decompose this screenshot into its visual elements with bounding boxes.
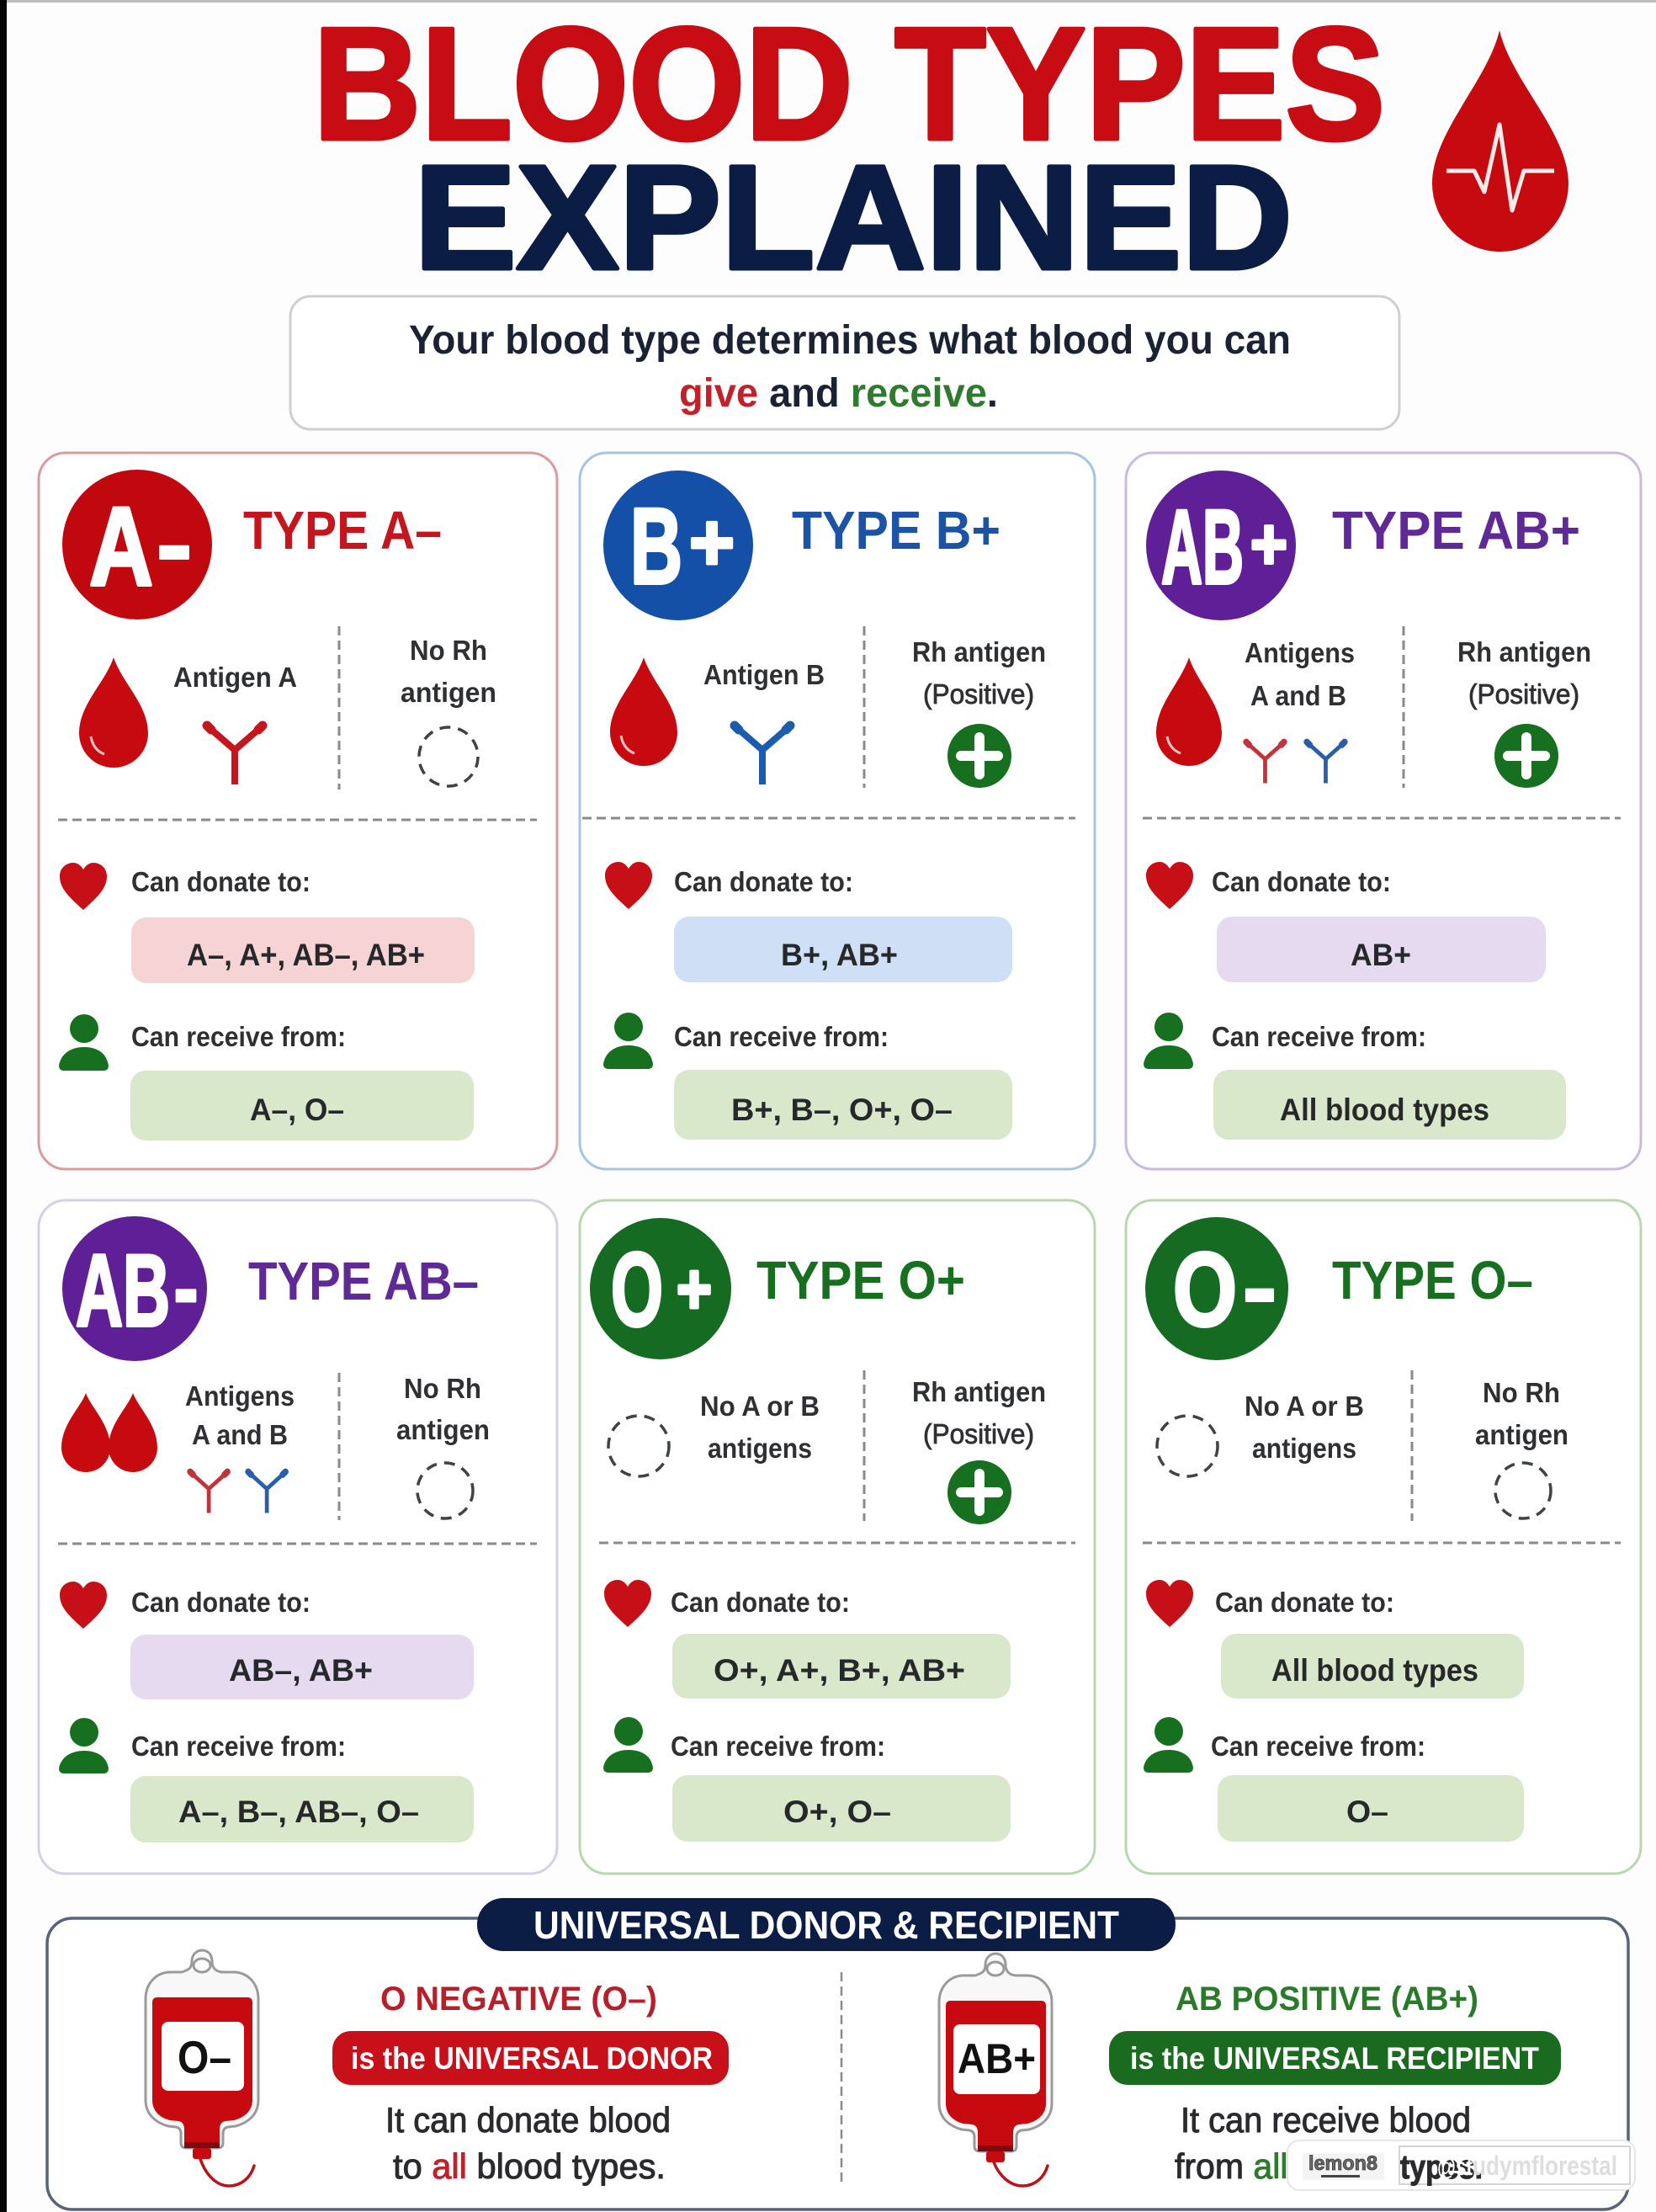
title: EXPLAINED [414,136,1292,300]
panel: type B+ [580,453,1095,1169]
badge: A-: – [158,482,190,607]
panel: universal donor and recipient [47,1898,1628,2209]
text: donor note [385,2100,671,2186]
text: antigens A and B: A and B [1250,680,1346,711]
badge: A-: A [89,485,153,609]
icon: antibody red [190,1471,227,1513]
text: antigens A and B: A and B [192,1419,288,1450]
subtitle box [290,296,1399,429]
icon: antibody red [1246,742,1284,783]
icon: heart [60,1582,107,1629]
icon: blood drop with pulse [1432,30,1568,252]
receive list [672,1775,1011,1842]
badge: AB- [62,1216,207,1361]
text: antigens A and B: Antigens [1245,637,1355,668]
icon: heart [1146,862,1193,909]
text: donor note: to all blood types. [393,2146,666,2186]
title: BLOOD TYPES [313,0,1385,173]
heading: type AB-: TYPE AB– [248,1251,479,1311]
subtitle box: Your blood type determines what blood you can [409,318,1291,363]
icon: blood bag AB+: AB+ [958,2035,1036,2082]
text: Rh antigen positive: Rh antigen [1457,636,1591,667]
donate list [674,917,1012,982]
text: Rh antigen positive: (Positive) [923,678,1034,710]
panel: type A- [39,453,557,1169]
panel: type O+ [580,1200,1095,1874]
badge: O+: + [677,1249,712,1328]
badge: AB+: AB [1161,489,1244,606]
text: antigens A and B [185,1380,295,1450]
donate list: A–, A+, AB–, AB+ [187,938,425,972]
pill: universal donor: is the UNIVERSAL DONOR [351,2041,713,2076]
icon: person [1144,1717,1193,1773]
icon: two drops [61,1393,157,1472]
subtitle box: give and receive. [679,371,998,416]
label: can receive: Can receive from: [1212,1021,1426,1052]
badge: O-: O [1173,1232,1237,1348]
label: can donate: Can donate to: [1212,866,1391,897]
icon: antibody red [207,726,263,784]
icon: empty circle [419,727,478,786]
receive list: O+, O– [783,1795,891,1829]
icon: antibody blue [248,1471,285,1513]
text: antigens A and B [1245,637,1355,711]
text: no Rh antigen: antigen [396,1414,490,1445]
text: Rh antigen positive: Rh antigen [912,1376,1046,1407]
text: recipient note: from all blood types. [1175,2146,1484,2186]
pill: universal recipient: is the UNIVERSAL RECIPIENT [1130,2041,1539,2076]
watermark: udymflorestal [1473,2151,1617,2181]
heading: type A-: TYPE A– [243,500,442,561]
icon: plus [1494,724,1558,788]
text: antigens A and B: Antigens [185,1380,295,1412]
heading: AB positive: AB POSITIVE (AB+) [1176,1981,1478,2018]
badge: AB-: AB [76,1233,170,1348]
icon: drop [610,657,677,766]
icon: drop [79,657,148,768]
text: Rh antigen positive [912,636,1046,710]
text: recipient note: It can receive blood [1181,2100,1471,2140]
donate list: AB–, AB+ [229,1653,373,1688]
text: no A or B antigens: No A or B [1245,1390,1364,1422]
icon: person [1144,1013,1193,1069]
watermark [1287,2140,1635,2190]
watermark: types. [1400,2149,1483,2186]
text: no A or B antigens: antigens [1252,1433,1356,1464]
receive list [674,1070,1012,1140]
panel: type AB+ [1126,453,1641,1169]
text: antigen A: Antigen A [173,662,297,693]
text: no Rh antigen [1475,1377,1568,1450]
icon: antibody blue [735,726,790,784]
badge: AB+: + [1250,504,1287,585]
text: no A or B antigens [700,1390,820,1464]
icon: heart [1146,1580,1193,1627]
heading: type B+: TYPE B+ [792,500,1000,561]
pill: universal recipient [1109,2031,1561,2085]
badge: A- [62,470,212,619]
text: Rh antigen positive [1457,636,1591,710]
label: can donate: Can donate to: [671,1587,850,1618]
badge: B+: B [630,487,682,607]
header pill: UNIVERSAL DONOR & RECIPIENT [533,1903,1119,1947]
icon: plus [947,1460,1011,1524]
watermark: lemon8 [1308,2152,1377,2175]
text: no Rh antigen: No Rh [410,635,487,666]
label: can donate: Can donate to: [674,866,853,897]
badge: O- [1145,1217,1288,1360]
text: no Rh antigen: No Rh [404,1373,481,1404]
receive list [1213,1070,1566,1140]
text: Rh antigen positive: (Positive) [1468,678,1579,710]
icon: heart [605,862,652,909]
donate list: All blood types [1271,1653,1478,1688]
receive list [130,1071,474,1141]
pill: universal donor [332,2031,729,2085]
text: Rh antigen positive: Rh antigen [912,636,1046,667]
icon: heart [60,863,107,910]
heading: O negative: O NEGATIVE (O–) [380,1981,657,2018]
title [313,0,1385,300]
icon: empty circle [608,1416,669,1476]
receive list: B+, B–, O+, O– [731,1093,953,1127]
receive list: A–, B–, AB–, O– [178,1795,419,1829]
label: can receive: Can receive from: [674,1021,889,1052]
label: can donate: Can donate to: [131,866,310,897]
icon: plus [947,724,1011,788]
icon: person [59,1718,109,1773]
donate list [131,917,475,983]
text: no Rh antigen: antigen [401,677,496,708]
badge: O+: O [611,1232,663,1348]
heading: type AB+: TYPE AB+ [1332,500,1580,561]
badge: B+: + [689,497,735,588]
donate list [1221,1634,1524,1699]
text: no Rh antigen [401,635,496,708]
icon: blood bag AB+ [939,1954,1052,2186]
donate list: B+, AB+ [781,938,898,972]
text: Rh antigen positive [912,1376,1046,1449]
icon: antibody blue [1307,742,1345,783]
panel: type O- [1126,1200,1641,1874]
label: can donate: Can donate to: [131,1587,310,1618]
text: no A or B antigens: antigens [708,1433,812,1464]
badge: AB+ [1146,471,1296,620]
label: can receive: Can receive from: [671,1731,885,1762]
label: can receive: Can receive from: [1211,1731,1425,1762]
receive list: O– [1346,1795,1388,1829]
badge: AB-: – [175,1231,197,1345]
text: no Rh antigen: No Rh [1483,1377,1560,1408]
badge: O+ [590,1218,731,1359]
donate list [130,1635,474,1699]
heading: type O-: TYPE O– [1332,1250,1533,1311]
text: no A or B antigens: No A or B [700,1390,820,1422]
icon: empty circle [1495,1463,1551,1518]
receive list [130,1776,474,1842]
donate list [1217,917,1546,982]
icon: empty circle [417,1463,473,1518]
text: Rh antigen positive: (Positive) [923,1418,1034,1449]
receive list: A–, O– [250,1093,344,1127]
icon: empty circle [1157,1416,1218,1476]
text: recipient note [1175,2100,1484,2186]
icon: blood bag O- [146,1950,258,2186]
watermark: @st [1437,2153,1473,2181]
label: can receive: Can receive from: [131,1731,346,1762]
text: no Rh antigen [396,1373,490,1445]
badge: B+ [603,471,753,620]
text: donor note: It can donate blood [385,2100,671,2140]
donate list: AB+ [1351,938,1411,972]
label: can receive: Can receive from: [131,1021,346,1052]
donate list [672,1634,1011,1699]
icon: person [603,1717,653,1773]
donate list: O+, A+, B+, AB+ [714,1653,965,1688]
label: can donate: Can donate to: [1215,1587,1394,1618]
icon: person [603,1013,653,1069]
text: antigen B: Antigen B [703,659,825,690]
panel: type AB- [39,1200,557,1874]
text: no Rh antigen: antigen [1475,1419,1568,1450]
heading: type O+: TYPE O+ [756,1250,965,1311]
text: no A or B antigens [1245,1390,1364,1464]
icon: person [59,1014,109,1071]
icon: heart [604,1580,651,1627]
badge: O-: – [1245,1230,1275,1346]
receive list [1218,1775,1524,1842]
icon: blood bag O-: O– [178,2031,231,2083]
receive list: All blood types [1280,1093,1489,1127]
icon: drop [1156,657,1222,766]
